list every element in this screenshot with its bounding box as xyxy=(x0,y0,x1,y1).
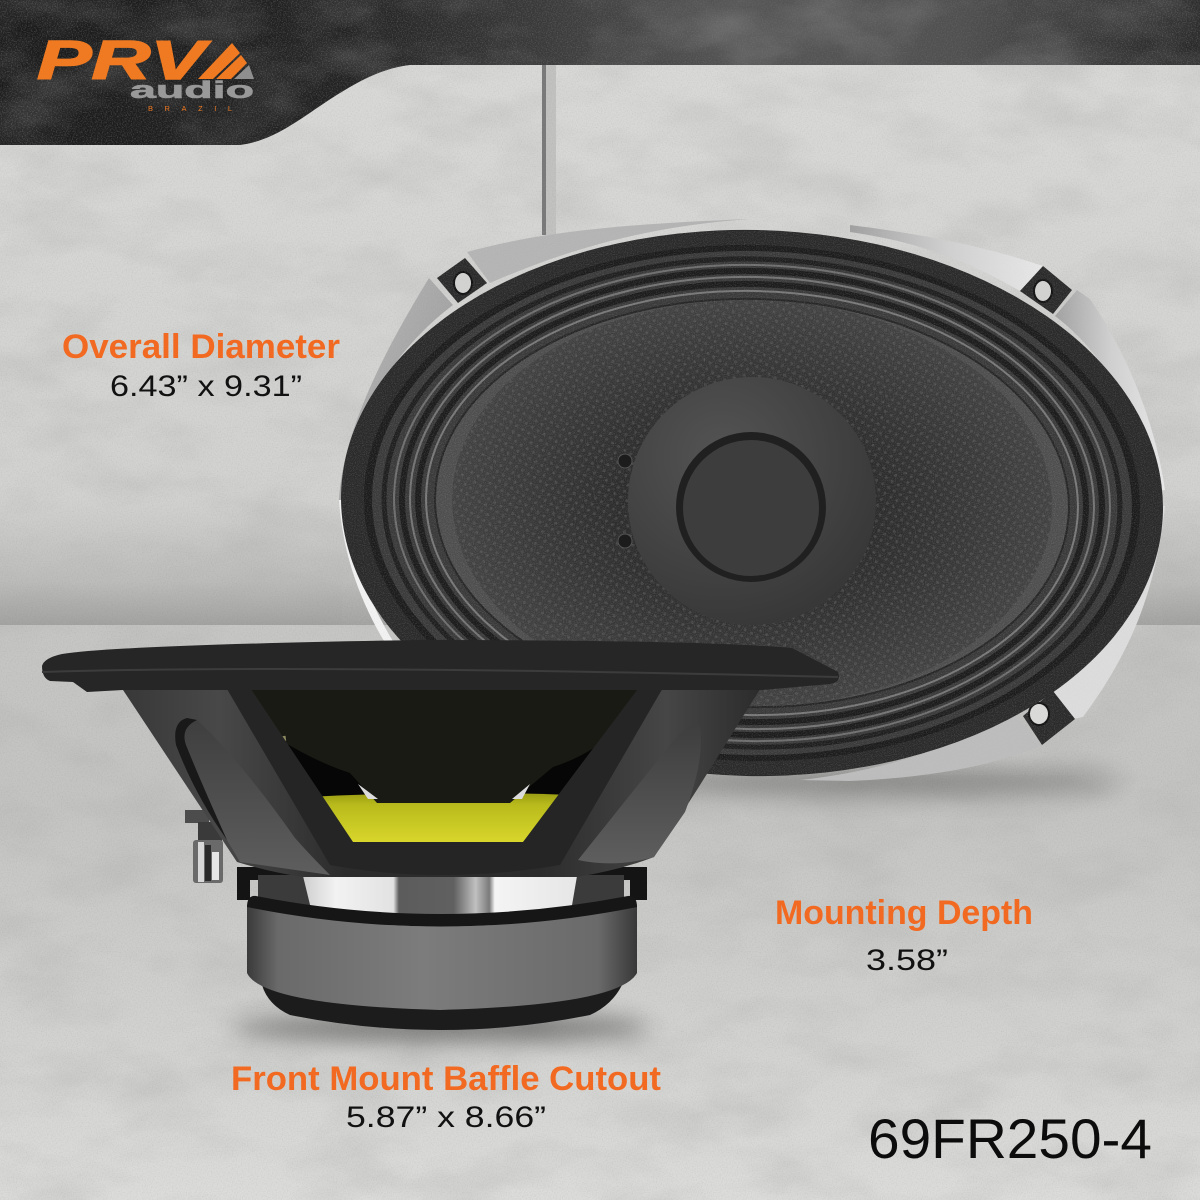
rear basket cup xyxy=(243,687,640,803)
left rib shadow crescent xyxy=(175,718,227,840)
terminal rivets xyxy=(618,454,632,548)
front view speaker xyxy=(335,219,1169,785)
dark header band xyxy=(0,0,1200,145)
label: front mount baffle cutout xyxy=(231,1060,661,1134)
mounting tabs with holes xyxy=(437,258,1075,745)
flange xyxy=(42,640,839,692)
right basket rib xyxy=(578,725,701,863)
soft shadow from front speaker xyxy=(640,768,1120,796)
basket window frame strut xyxy=(220,677,664,875)
stamped frame wedges xyxy=(339,219,1165,781)
logo: PRV Audio Brazil: BRAZIL xyxy=(148,104,232,113)
model number: 69FR250-4 xyxy=(868,1107,1152,1170)
soft shadow under side speaker xyxy=(230,1015,650,1041)
label: front mount baffle cutout: Front Mount Baffle Cutout xyxy=(231,1060,661,1098)
yellow cone xyxy=(308,793,572,842)
grit over speaker face xyxy=(342,231,1162,775)
chrome glints xyxy=(358,784,530,799)
chrome pole ring xyxy=(303,876,577,926)
label: mounting depth: 3.58” xyxy=(866,944,948,977)
magnet xyxy=(247,896,637,1030)
basket body xyxy=(123,686,762,877)
label: mounting depth xyxy=(775,894,1033,977)
logo: PRV Audio Brazil: audio xyxy=(130,77,254,104)
terminal xyxy=(185,810,223,883)
concrete wall background xyxy=(0,0,1200,625)
label: mounting depth: Mounting Depth xyxy=(775,894,1033,932)
left basket rib xyxy=(175,718,330,875)
label: overall diameter: Overall Diameter xyxy=(62,328,340,366)
label: overall diameter xyxy=(62,328,340,403)
basket window xyxy=(243,686,640,842)
logo: PRV Audio Brazil: PRV xyxy=(37,29,211,91)
side view speaker xyxy=(42,640,839,1030)
dust cap xyxy=(628,377,876,625)
surround and cone xyxy=(335,221,1169,785)
label: front mount baffle cutout: 5.87” x 8.66” xyxy=(346,1101,546,1134)
wire lead xyxy=(268,736,286,743)
logo: PRV Audio Brazil xyxy=(37,29,254,113)
label: overall diameter: 6.43” x 9.31” xyxy=(110,370,302,403)
rear ring behind magnet xyxy=(237,867,647,900)
